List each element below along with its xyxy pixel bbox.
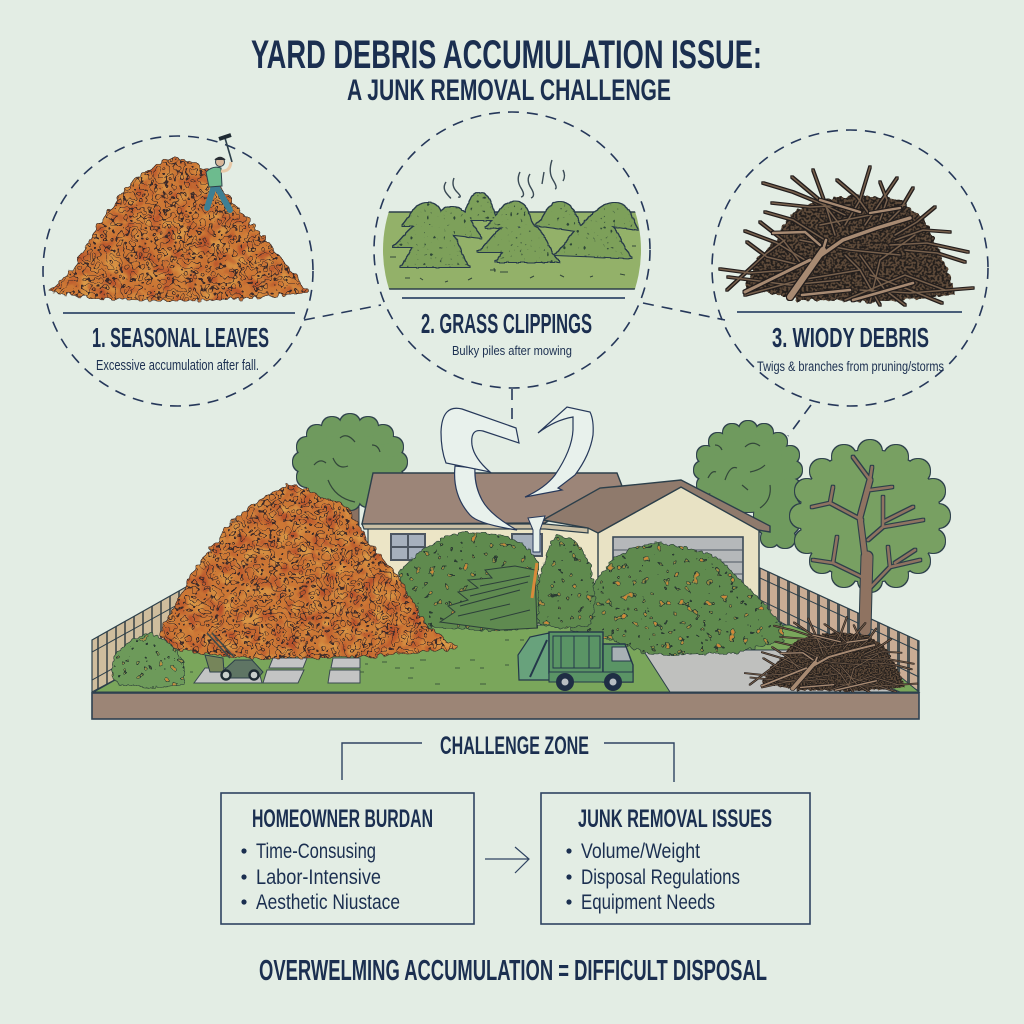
back left tree xyxy=(293,414,407,535)
divider xyxy=(737,311,962,313)
heading: 3. WIODY DEBRIS xyxy=(772,322,929,353)
arrow between panels xyxy=(485,847,529,873)
ground base xyxy=(92,693,919,719)
panel: grass clippings xyxy=(374,112,650,388)
panel: woody debris xyxy=(712,130,988,406)
fan of grass clippings xyxy=(440,563,537,630)
chute xyxy=(528,516,545,552)
back right tree xyxy=(694,421,802,548)
panel: seasonal leaves xyxy=(43,135,313,406)
left mid bush xyxy=(398,532,538,630)
garage xyxy=(543,480,770,640)
driveway xyxy=(643,650,900,692)
title: A JUNK REMOVAL CHALLENGE xyxy=(347,74,671,107)
caption: Bulky piles after mowing xyxy=(452,343,572,358)
right fence xyxy=(760,568,919,691)
title xyxy=(251,33,762,107)
front tree xyxy=(790,440,950,630)
panel: homeowner burden: HOMEOWNER BURDAN xyxy=(252,805,433,833)
divider xyxy=(63,312,295,314)
label: CHALLENGE ZONE xyxy=(440,732,589,760)
challenge zone heading xyxy=(342,732,674,782)
house xyxy=(362,473,770,640)
panel: homeowner burden: Aesthetic Niustace xyxy=(256,891,400,914)
title: YARD DEBRIS ACCUMULATION ISSUE: xyxy=(251,33,762,77)
right bush xyxy=(570,543,783,655)
yard scene xyxy=(92,407,950,719)
small left bush xyxy=(112,633,184,688)
lawn with mounds xyxy=(380,193,644,289)
grass tufts xyxy=(190,640,524,684)
dashed circle xyxy=(43,136,313,406)
panel: homeowner burden: Time-Consusing xyxy=(256,840,376,863)
left fence xyxy=(92,587,186,692)
panel: junk removal issues: Disposal Regulations xyxy=(581,866,740,889)
lawn mower xyxy=(205,633,263,680)
lawn xyxy=(94,625,919,692)
caption: Twigs & branches from pruning/storms xyxy=(757,359,944,374)
main leaf pile xyxy=(160,485,457,658)
bracket xyxy=(342,743,674,782)
panel: junk removal issues: Equipment Needs xyxy=(581,891,715,914)
connector: circles and scene xyxy=(304,303,811,436)
panel: junk removal issues: JUNK REMOVAL ISSUES xyxy=(578,805,772,833)
debris pile xyxy=(745,617,917,693)
middle bush xyxy=(533,535,595,628)
paving xyxy=(194,658,360,683)
panel: homeowner burden xyxy=(221,793,474,924)
dashed circle xyxy=(374,112,650,388)
heading: 2. GRASS CLIPPINGS xyxy=(421,308,592,339)
caption: Excessive accumulation after fall. xyxy=(96,358,259,374)
panel: homeowner burden: Labor-Intensive xyxy=(256,866,381,889)
curved white arrow left xyxy=(441,408,519,530)
window xyxy=(391,534,542,560)
steam xyxy=(444,160,564,198)
divider xyxy=(402,297,625,299)
recycling truck xyxy=(518,632,633,691)
main roof xyxy=(362,473,622,524)
heading: 1. SEASONAL LEAVES xyxy=(92,322,269,353)
person with rake xyxy=(206,135,232,210)
curved white arrow right xyxy=(525,407,593,497)
dashed circle xyxy=(712,130,988,406)
panel: junk removal issues: Volume/Weight xyxy=(581,840,700,863)
leaf pile xyxy=(48,157,307,301)
stick pile xyxy=(720,167,973,305)
panel: junk removal issues xyxy=(541,793,810,924)
